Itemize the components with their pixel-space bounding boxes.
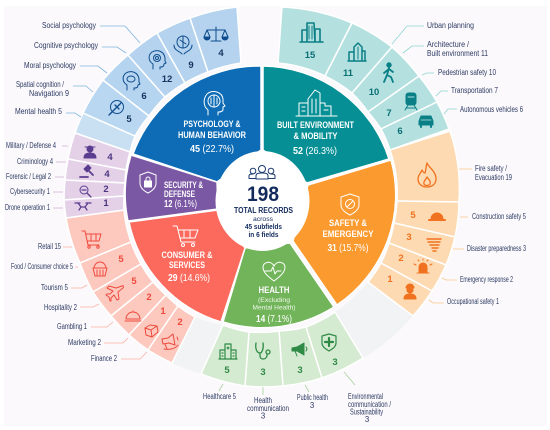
outer segments: safety bbox=[368, 131, 459, 316]
sector: consumer bbox=[129, 210, 245, 322]
heading: consumer: SERVICES bbox=[169, 260, 205, 270]
labels: consumer: Food / Consumer choice 5 bbox=[11, 262, 73, 271]
labels: consumer: Finance 2 bbox=[91, 354, 117, 363]
outer segments: psychology bbox=[75, 7, 241, 152]
labels: consumer bbox=[11, 242, 117, 363]
labels: psychology: Cognitive psychology bbox=[34, 41, 98, 50]
labels: health: Public health bbox=[297, 393, 328, 402]
numbers: built environment: 11 bbox=[343, 68, 354, 79]
heading: safety: EMERGENCY bbox=[322, 229, 374, 239]
labels: health: communication / bbox=[348, 400, 392, 409]
heading: built environment: & MOBILITY bbox=[294, 131, 338, 141]
panel: consumer and services bbox=[11, 210, 245, 363]
sector: security bbox=[125, 155, 218, 221]
numbers: safety: 3 bbox=[406, 232, 412, 243]
center circle bbox=[216, 151, 310, 251]
total caption bbox=[234, 206, 293, 239]
outer segments: health bbox=[201, 312, 363, 387]
icons: health bbox=[219, 334, 336, 359]
numbers: consumer: 5 bbox=[131, 276, 137, 287]
total caption: across bbox=[253, 216, 274, 223]
leaders: psychology bbox=[66, 26, 140, 117]
numbers: security: 2 bbox=[103, 184, 109, 195]
labels: safety: Evacuation 19 bbox=[475, 173, 512, 182]
labels: safety: Disaster preparedness 3 bbox=[467, 244, 526, 253]
icons: safety bbox=[404, 163, 445, 299]
numbers: security bbox=[103, 152, 113, 209]
heading: health: HEALTH bbox=[258, 285, 290, 295]
labels: built environment: Pedestrian safety 10 bbox=[438, 68, 497, 77]
labels: health: communication bbox=[247, 404, 289, 413]
labels: safety: Occupational safety 1 bbox=[447, 297, 499, 306]
labels: safety bbox=[447, 164, 526, 306]
icon: city buildings bbox=[296, 90, 337, 116]
numbers: safety bbox=[387, 210, 416, 285]
numbers: health: 3 bbox=[297, 365, 303, 376]
panel: security and defense bbox=[5, 133, 218, 221]
numbers: consumer: 1 bbox=[160, 306, 166, 317]
numbers: health: 3 bbox=[260, 367, 266, 378]
heading: psychology: 45 (22.7%) bbox=[190, 144, 234, 155]
numbers: psychology bbox=[126, 48, 224, 125]
icon: padlock shield bbox=[140, 172, 156, 193]
labels: health: Sustainability bbox=[350, 408, 383, 416]
heading: health: Mental Health) bbox=[252, 304, 296, 312]
numbers: security: 4 bbox=[107, 152, 113, 163]
icon: shield bbox=[341, 194, 359, 215]
icons: security bbox=[75, 146, 96, 210]
heading: security: SECURITY & bbox=[164, 180, 203, 190]
heading: health bbox=[252, 285, 296, 325]
numbers: security: 4 bbox=[104, 169, 110, 180]
labels: built environment: Transportation 7 bbox=[451, 86, 498, 95]
leaders: health bbox=[219, 372, 355, 395]
numbers: built environment: 15 bbox=[305, 50, 316, 61]
labels: safety: Construction safety 5 bbox=[472, 212, 526, 221]
sector: safety bbox=[293, 160, 396, 305]
sector: built environment bbox=[263, 66, 389, 183]
numbers: psychology: 9 bbox=[188, 60, 194, 71]
leaders: built environment bbox=[392, 26, 457, 114]
panel: built environment and mobility bbox=[263, 7, 523, 183]
total caption: TOTAL RECORDS bbox=[234, 206, 293, 215]
labels: health: Healthcare 5 bbox=[203, 392, 236, 401]
labels: built environment: Urban planning bbox=[427, 21, 474, 30]
panel: health bbox=[201, 243, 392, 424]
labels: psychology: Mental health 5 bbox=[15, 107, 63, 116]
numbers: built environment: 10 bbox=[369, 87, 379, 98]
labels: health: 3 bbox=[365, 415, 369, 424]
outer segments: security bbox=[64, 133, 130, 218]
numbers: psychology: 4 bbox=[218, 48, 224, 59]
labels: safety: Fire safety / bbox=[475, 164, 508, 173]
labels: built environment: Architecture / bbox=[427, 40, 470, 49]
numbers: safety: 1 bbox=[387, 274, 393, 285]
total caption: 45 subfields bbox=[245, 224, 282, 231]
labels: security bbox=[5, 141, 56, 212]
labels: built environment bbox=[427, 21, 523, 114]
labels: health: Environmental bbox=[348, 392, 383, 401]
labels: psychology: Moral psychology bbox=[24, 61, 76, 70]
labels: security: Drone operation 1 bbox=[5, 203, 50, 212]
total caption: in 6 fields bbox=[248, 232, 279, 239]
heading: safety bbox=[322, 218, 374, 254]
heading: psychology: HUMAN BEHAVIOR bbox=[178, 130, 246, 140]
heading: built environment bbox=[277, 120, 354, 157]
numbers: built environment bbox=[305, 50, 403, 137]
heading: built environment: BUILT ENVIRONMENT bbox=[277, 120, 354, 130]
labels: security: Criminology 4 bbox=[17, 157, 53, 166]
labels: health: 3 bbox=[310, 401, 314, 410]
outer segments: built environment bbox=[278, 7, 449, 150]
heading: health: (Excluding bbox=[258, 297, 290, 304]
heading: security bbox=[164, 180, 203, 210]
numbers: health bbox=[224, 357, 338, 378]
labels: health bbox=[203, 392, 392, 424]
numbers: built environment: 7 bbox=[386, 108, 392, 119]
white disc bbox=[216, 151, 310, 251]
labels: security: Cybersecurity 1 bbox=[10, 187, 50, 196]
labels: consumer: Tourism 5 bbox=[41, 283, 69, 292]
numbers: safety: 2 bbox=[398, 253, 404, 264]
heading: consumer: 29 (14.6%) bbox=[168, 273, 210, 284]
labels: built environment: Autonomous vehicles 6 bbox=[460, 105, 523, 114]
numbers: security: 1 bbox=[103, 198, 109, 209]
numbers: consumer: 2 bbox=[177, 317, 183, 328]
leaders: safety bbox=[429, 169, 472, 303]
numbers: built environment: 6 bbox=[397, 126, 403, 137]
heading: security: DEFENSE bbox=[164, 189, 195, 199]
heading: built environment: 52 (26.3%) bbox=[293, 146, 337, 157]
labels: consumer: Hospitality 2 bbox=[44, 303, 77, 312]
numbers: health: 3 bbox=[332, 357, 338, 368]
labels: security: Forensic / Legal 2 bbox=[6, 172, 51, 181]
labels: psychology bbox=[15, 21, 98, 116]
labels: consumer: Gambling 1 bbox=[57, 322, 87, 331]
icon: people bbox=[249, 166, 275, 179]
heading: safety: SAFETY & bbox=[329, 218, 367, 228]
icon: heart with pulse bbox=[263, 262, 285, 281]
leaders: consumer bbox=[63, 247, 147, 359]
heading: psychology bbox=[178, 119, 246, 155]
labels: safety: Emergency response 2 bbox=[460, 275, 513, 284]
panel: psychology and human behavior bbox=[15, 7, 261, 182]
heading: security: 12 (6.1%) bbox=[164, 199, 197, 210]
numbers: consumer: 5 bbox=[118, 254, 124, 265]
heading: consumer bbox=[162, 250, 213, 284]
icon: shopping cart bbox=[173, 226, 198, 246]
blank ring gaps bbox=[172, 282, 413, 374]
icons: built environment bbox=[300, 23, 433, 127]
labels: security: Military / Defense 4 bbox=[6, 141, 56, 150]
icon: head with brain bbox=[204, 92, 225, 115]
heading: psychology: PSYCHOLOGY & bbox=[184, 119, 241, 129]
numbers: safety: 5 bbox=[410, 210, 416, 221]
icons: consumer bbox=[82, 231, 178, 349]
outer segments: consumer bbox=[66, 210, 195, 363]
total number: 198 bbox=[247, 183, 279, 206]
numbers: psychology: 12 bbox=[162, 74, 172, 85]
leaders: security bbox=[53, 146, 68, 208]
labels: health: 3 bbox=[261, 412, 265, 420]
panel: safety and emergency bbox=[293, 131, 526, 316]
labels: psychology: Social psychology bbox=[42, 21, 96, 30]
heading: safety: 31 (15.7%) bbox=[328, 243, 368, 254]
sector: psychology bbox=[133, 66, 261, 182]
icons: psychology bbox=[109, 27, 228, 115]
labels: consumer: Retail 15 bbox=[38, 242, 61, 251]
numbers: psychology: 6 bbox=[141, 91, 147, 102]
numbers: health: 5 bbox=[224, 365, 230, 376]
heading: health: 14 (7.1%) bbox=[256, 314, 292, 325]
labels: health: Health bbox=[254, 396, 272, 405]
numbers: consumer bbox=[118, 254, 183, 328]
heading: consumer: CONSUMER & bbox=[162, 250, 213, 260]
sector: health bbox=[223, 243, 334, 328]
numbers: consumer: 2 bbox=[146, 292, 152, 303]
numbers: psychology: 5 bbox=[126, 114, 132, 125]
labels: consumer: Marketing 2 bbox=[68, 338, 101, 347]
labels: built environment: Built environment 11 bbox=[427, 49, 488, 58]
labels: psychology: Navigation 9 bbox=[29, 89, 69, 98]
labels: psychology: Spatial cognition / bbox=[16, 80, 65, 89]
